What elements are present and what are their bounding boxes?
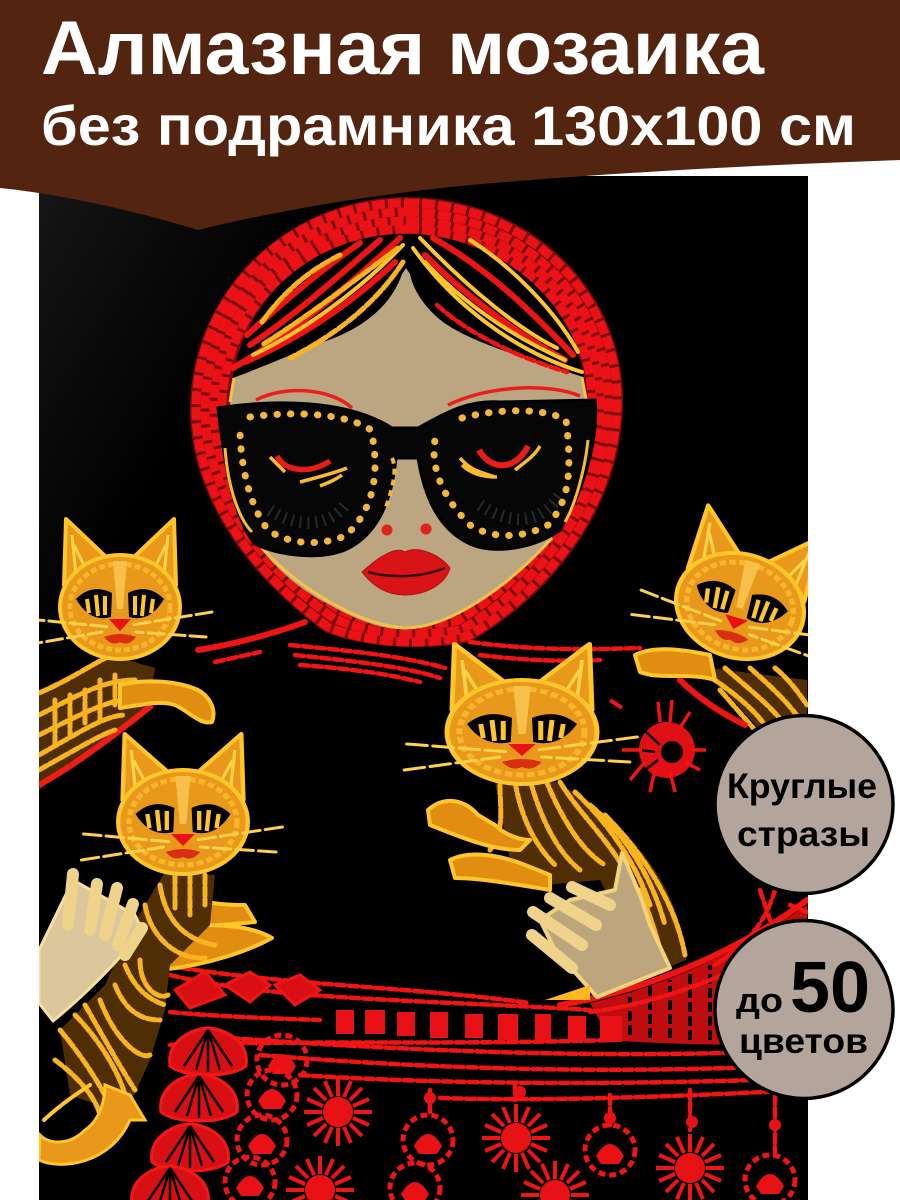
ring medallions bbox=[257, 1035, 307, 1085]
badge: up to 50 colours: цветов bbox=[739, 1022, 868, 1061]
lip line bbox=[368, 568, 445, 576]
lips bbox=[362, 550, 450, 595]
artwork background bbox=[39, 176, 808, 1200]
hood interior bbox=[230, 234, 586, 403]
cat: center bbox=[404, 644, 686, 975]
badge: up to 50 colours: 50 bbox=[790, 948, 870, 1028]
scarf stitches below chin bbox=[198, 622, 640, 682]
badge: up to 50 colours: до bbox=[736, 982, 783, 1020]
face outline gold bbox=[230, 377, 586, 628]
cat: top left bbox=[26, 519, 213, 790]
face bbox=[228, 268, 592, 629]
cat: right bbox=[630, 503, 808, 730]
red sunburst flower bbox=[610, 700, 706, 792]
hand: center bbox=[532, 853, 670, 1000]
hair strands bbox=[233, 238, 582, 372]
eyebrows bbox=[256, 388, 580, 408]
right skirt panel bbox=[590, 905, 807, 1045]
fans column bbox=[170, 1028, 246, 1075]
eyes bbox=[270, 446, 540, 486]
subtitle: без подрамника 130х100 см bbox=[41, 94, 856, 157]
headscarf bbox=[190, 197, 623, 647]
cat: bottom left bbox=[39, 734, 282, 1164]
hand: left bbox=[39, 874, 142, 1021]
badge: round rhinestones: стразы bbox=[737, 815, 870, 854]
title: Алмазная мозаика bbox=[41, 6, 765, 91]
skirt embroidery bbox=[130, 860, 807, 1200]
fabric texture top left bbox=[39, 193, 201, 500]
sunburst medallions bbox=[304, 1078, 372, 1146]
badge: round rhinestones bbox=[715, 716, 893, 894]
badge: round rhinestones: Круглые bbox=[727, 767, 877, 806]
woven figures row bbox=[336, 1010, 622, 1042]
header banner bbox=[0, 0, 900, 230]
badge: up to 50 colours bbox=[715, 920, 893, 1098]
cheek dots bbox=[382, 524, 432, 536]
sunglasses bbox=[218, 400, 596, 556]
panel: embroidery artwork bbox=[26, 176, 860, 1200]
